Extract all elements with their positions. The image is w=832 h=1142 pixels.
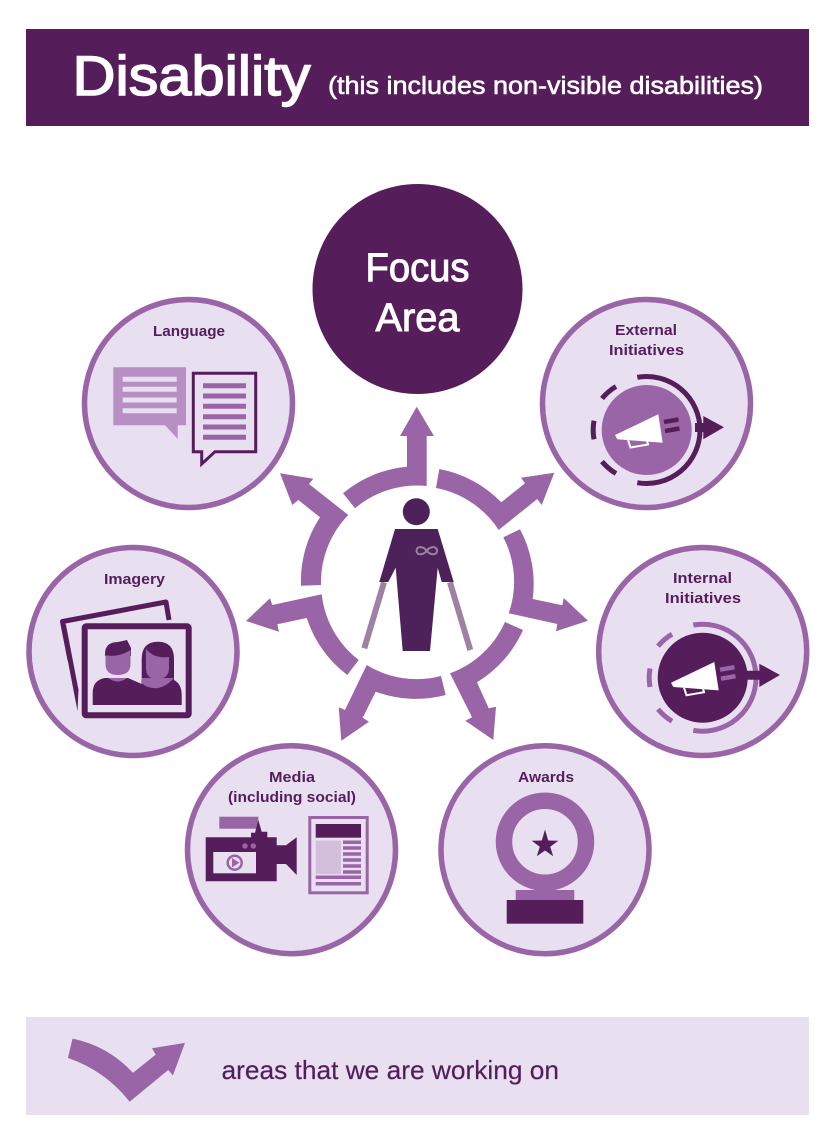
panel: imagery: Imagery	[104, 571, 166, 588]
arrow: to imagery	[246, 594, 359, 675]
focus area circle: Focus	[366, 246, 470, 290]
panel: media: (including social)	[228, 789, 356, 806]
arrow ring	[246, 407, 588, 741]
panel: internal initiatives: Initiatives	[665, 590, 741, 607]
title banner	[26, 29, 809, 126]
panel: external initiatives: External	[615, 322, 677, 339]
icon: photographs	[60, 602, 189, 715]
icon: award trophy	[504, 801, 586, 924]
panel: external initiatives	[542, 300, 750, 508]
icon: person with crutches	[364, 498, 470, 651]
arrow: to external initiatives	[436, 469, 554, 530]
focus area circle	[312, 184, 522, 394]
arrow: legend key	[68, 1039, 185, 1102]
title banner: (this includes non-visible disabilities)	[328, 72, 763, 100]
panel: imagery	[29, 548, 237, 756]
panel: internal initiatives: Internal	[673, 570, 732, 587]
arrow: to media	[339, 665, 446, 741]
title banner: Disability	[72, 44, 310, 107]
arrow: to awards	[450, 622, 523, 740]
arrow: to language	[280, 473, 348, 586]
panel: internal initiatives	[599, 548, 807, 756]
icon: megaphone target	[649, 624, 780, 731]
focus area circle: Area	[376, 296, 460, 340]
panel: language	[84, 300, 292, 508]
panel: external initiatives: Initiatives	[609, 342, 684, 359]
icon: newspaper	[310, 818, 367, 893]
arrow: to internal initiatives	[503, 529, 588, 631]
panel: media: Media	[269, 769, 316, 786]
panel: media	[188, 746, 396, 954]
icon: speech bubbles	[113, 367, 256, 464]
panel: awards	[441, 746, 649, 954]
icon: megaphone target	[593, 376, 724, 484]
panel: language: Language	[153, 323, 225, 340]
legend: areas that we are working on	[222, 1055, 559, 1085]
legend	[26, 1017, 809, 1115]
panel: awards: Awards	[518, 769, 574, 786]
icon: video camera	[206, 817, 297, 881]
arrow: to focus area	[343, 407, 434, 508]
